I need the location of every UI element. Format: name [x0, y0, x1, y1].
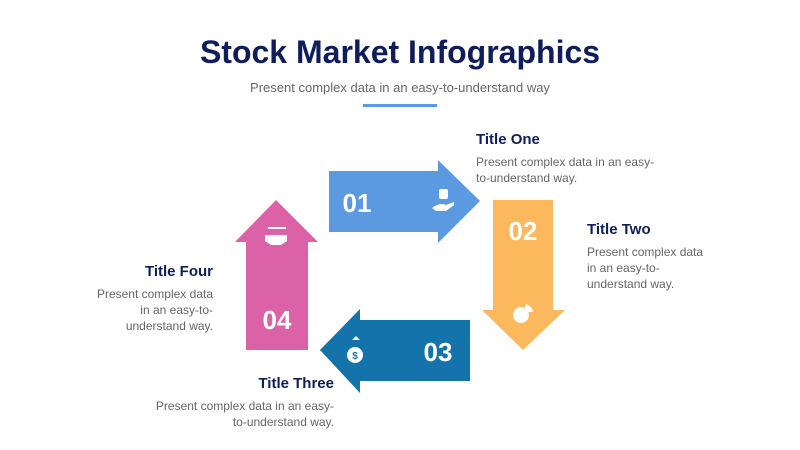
text: title two: understand way.: [587, 277, 674, 291]
text: title four: Title Four: [145, 263, 213, 280]
arrow 02: 02: [509, 216, 537, 246]
text: title three: Present complex data in an easy-: [156, 399, 334, 413]
text: title one: to-understand way.: [476, 171, 577, 185]
title: Stock Market Infographics: [200, 34, 600, 70]
text: title two: Present complex data: [587, 245, 703, 259]
text: title three: [156, 375, 334, 429]
icon: pie chart: [513, 304, 533, 323]
arrow 04: 04: [263, 305, 292, 335]
arrow 02: [482, 200, 565, 350]
icon: hand with bag: [432, 189, 454, 211]
text: title four: understand way.: [126, 319, 213, 333]
underline: [363, 104, 437, 107]
text: title two: Title Two: [587, 221, 651, 238]
arrow 03: 03: [424, 337, 452, 367]
icon: money bag: $: [352, 351, 358, 362]
text: title one: Title One: [476, 131, 540, 148]
arrow 03: [320, 309, 470, 393]
text: title two: [587, 221, 704, 291]
text: title four: in an easy-to-: [140, 303, 213, 317]
arrow 04: [235, 200, 318, 350]
text: title one: [476, 131, 654, 185]
icon: money bag: [347, 336, 363, 363]
icon: handshake: [265, 227, 287, 245]
text: title three: Title Three: [258, 375, 334, 392]
text: title three: to-understand way.: [233, 415, 334, 429]
text: title one: Present complex data in an easy-: [476, 155, 654, 169]
arrow 01: 01: [343, 188, 371, 218]
text: title two: in an easy-to-: [587, 261, 660, 275]
text: title four: [97, 263, 214, 333]
text: title four: Present complex data: [97, 287, 213, 301]
subtitle: Present complex data in an easy-to-understand way: [250, 80, 550, 95]
arrow 01: [329, 160, 480, 243]
